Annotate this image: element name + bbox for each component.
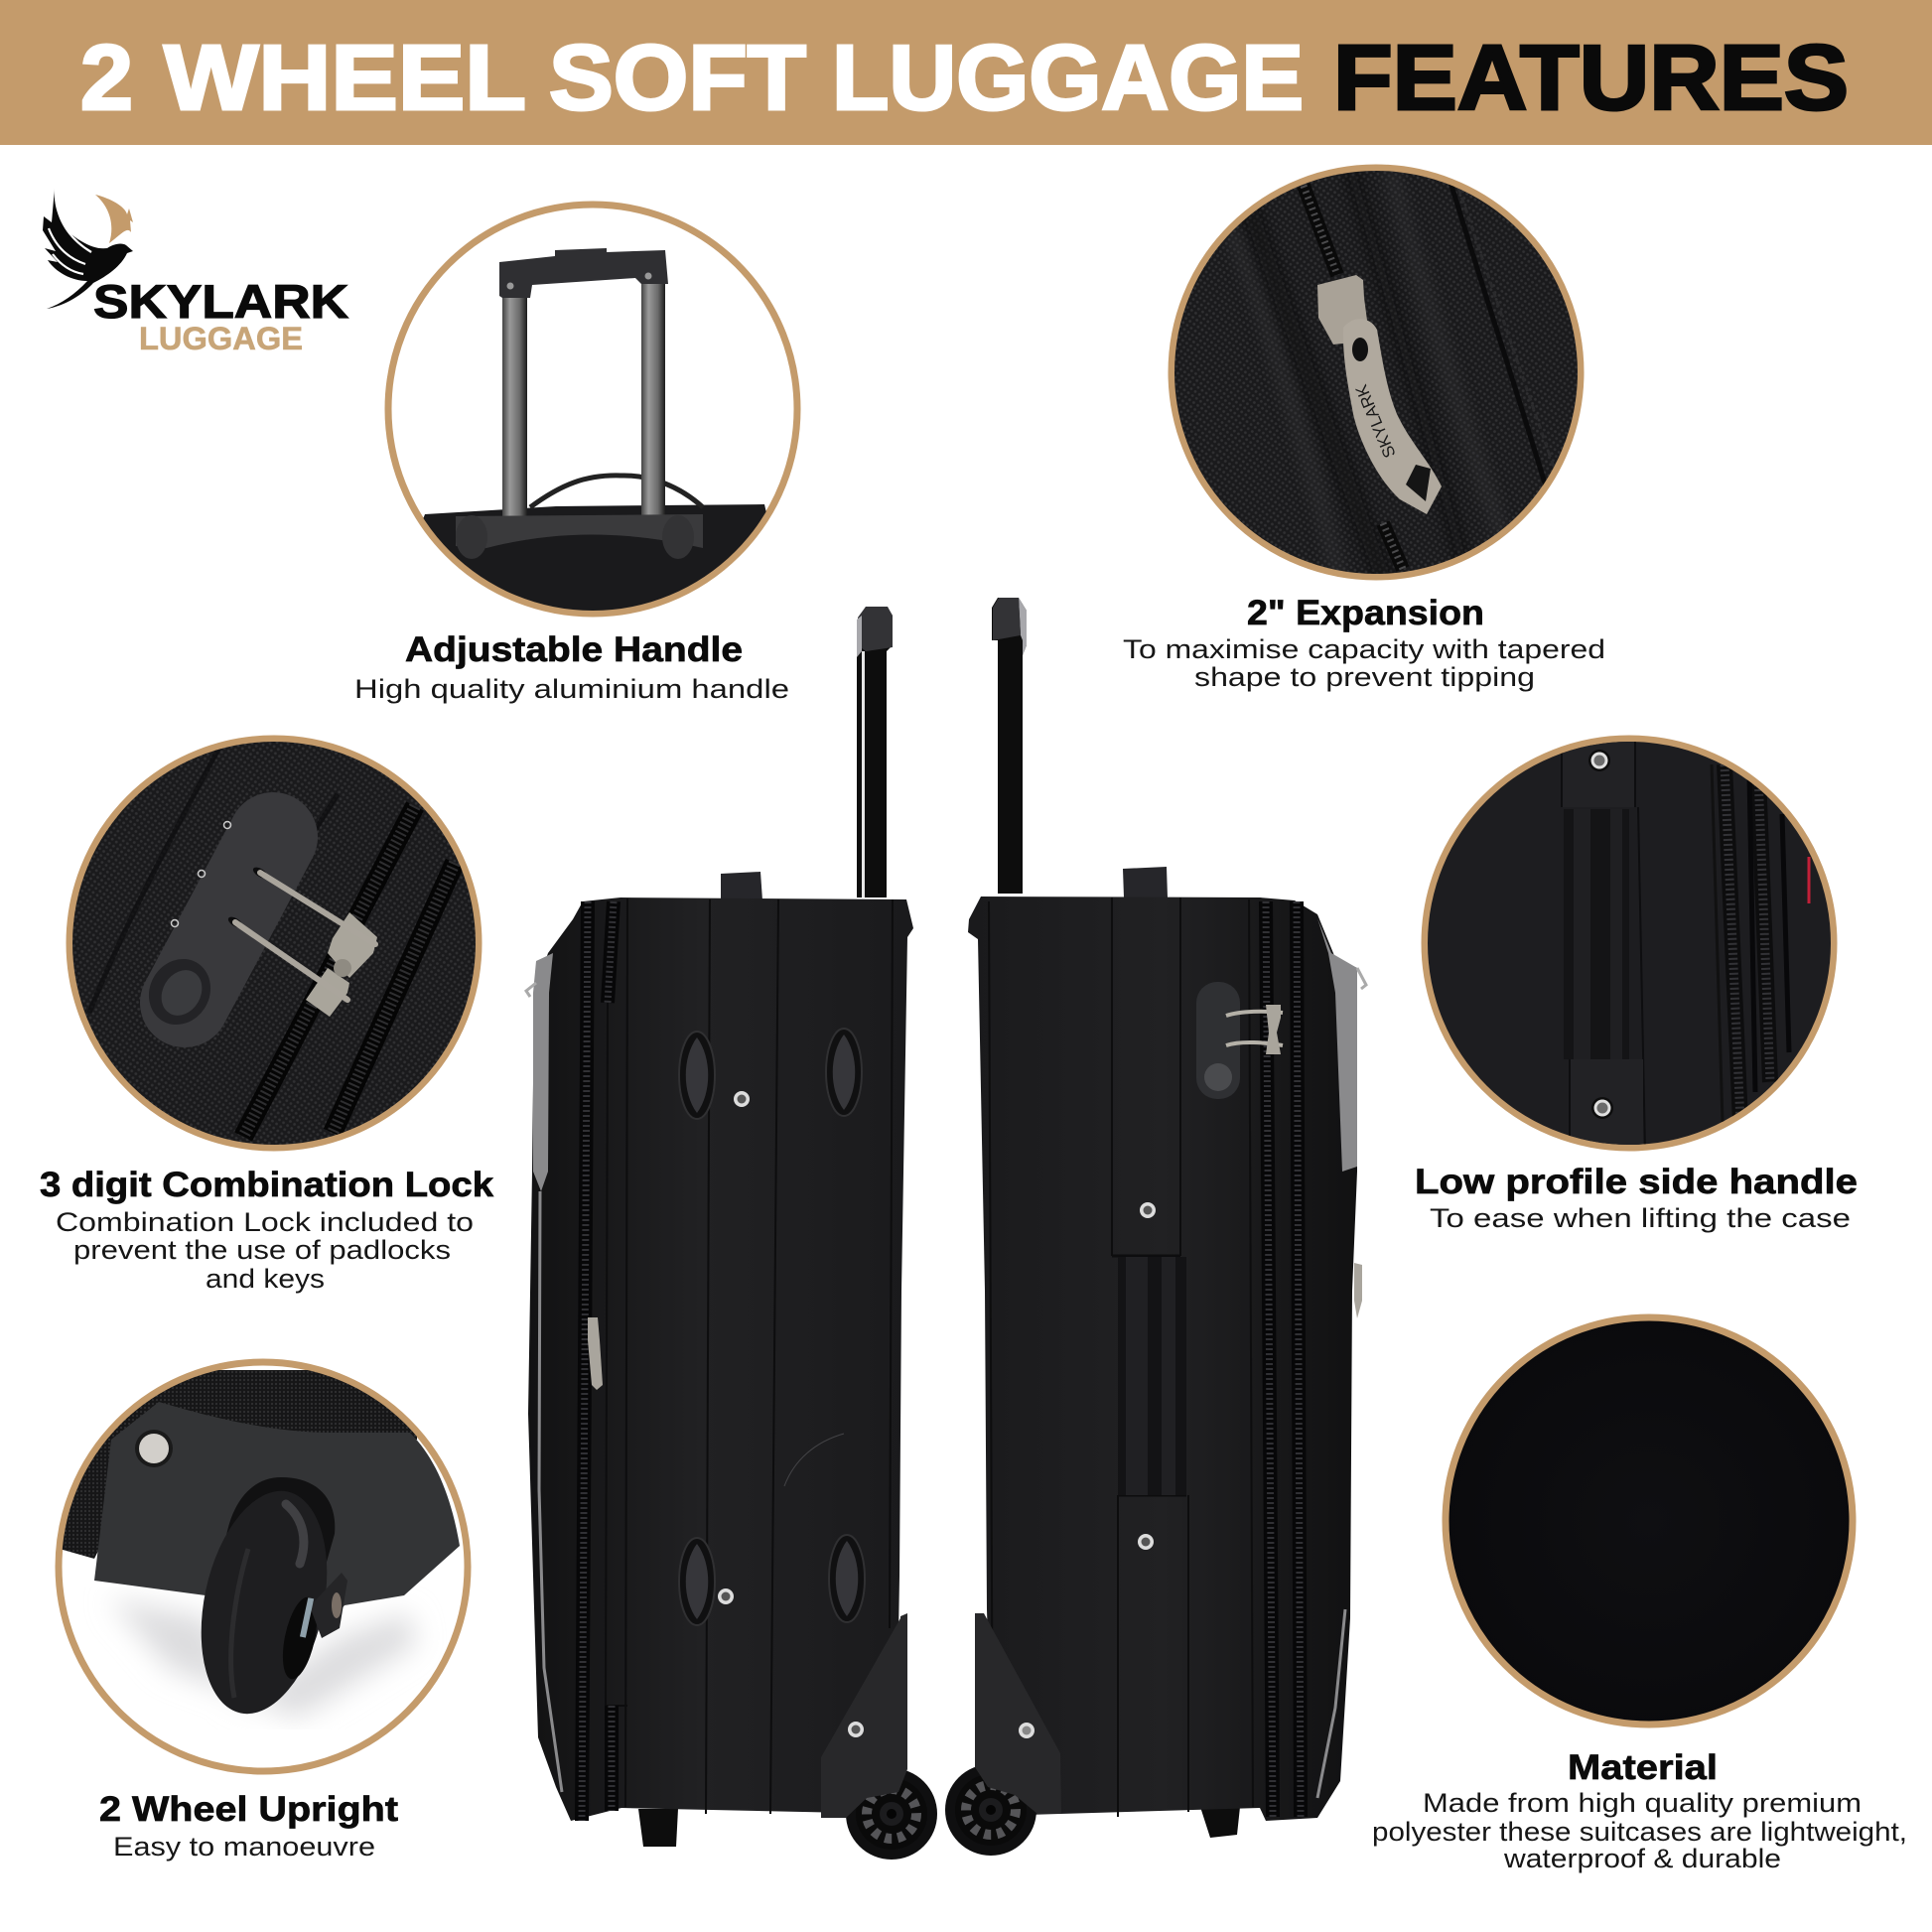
logo: Skylark Luggage bbox=[43, 188, 348, 356]
heading: 3 digit Combination Lock bbox=[40, 1166, 494, 1204]
photo circle: telescopic handle bbox=[377, 205, 797, 635]
carry handle bbox=[1123, 867, 1168, 897]
title bbox=[80, 26, 1849, 129]
rivets bbox=[718, 1091, 750, 1604]
side zip puller bbox=[1354, 1263, 1362, 1318]
description: and keys bbox=[206, 1264, 325, 1294]
combination lock bbox=[1196, 982, 1283, 1099]
logo: Skylark Luggage: LUGGAGE bbox=[139, 321, 303, 356]
description bbox=[1123, 634, 1605, 692]
zip puller bbox=[588, 1317, 603, 1390]
description: Combination Lock included to bbox=[56, 1207, 474, 1237]
carry handle bbox=[721, 872, 762, 900]
description: To maximise capacity with tapered bbox=[1123, 634, 1605, 664]
title: 2 bbox=[80, 26, 133, 129]
panel: adjustable handle bbox=[354, 205, 797, 704]
seams and stitching bbox=[989, 897, 1253, 1817]
rear foot bbox=[638, 1809, 678, 1847]
description bbox=[1372, 1788, 1907, 1873]
heading: Material bbox=[1568, 1748, 1718, 1787]
wheel bracket bbox=[975, 1613, 1061, 1814]
photo circle: wheel bbox=[59, 1362, 468, 1771]
wheel bbox=[945, 1764, 1036, 1856]
heading: Adjustable Handle bbox=[405, 630, 743, 669]
photo circle: side handle bbox=[1423, 736, 1840, 1153]
panel: material bbox=[1372, 1317, 1907, 1873]
bracket rivet bbox=[848, 1722, 864, 1737]
photo circle: fabric swatch bbox=[1446, 1317, 1853, 1725]
oval grip pads bbox=[679, 1029, 865, 1625]
description: High quality aluminium handle bbox=[354, 674, 789, 704]
logo: Skylark Luggage: SKYLARK bbox=[93, 275, 348, 328]
bracket rivet bbox=[1019, 1723, 1035, 1738]
case body bbox=[528, 897, 913, 1821]
description: shape to prevent tipping bbox=[1194, 662, 1535, 692]
panel: 2 wheel upright bbox=[59, 1362, 468, 1862]
title: WHEEL bbox=[164, 26, 526, 129]
telescopic handle bbox=[857, 607, 893, 897]
photo circle: lock bbox=[60, 725, 486, 1162]
photo circle: zip puller: SKYLARK bbox=[1351, 381, 1400, 461]
heading: 2 Wheel Upright bbox=[99, 1790, 398, 1829]
suitcase: right side view bbox=[945, 598, 1366, 1856]
suitcase: left side view bbox=[526, 607, 937, 1860]
description: To ease when lifting the case bbox=[1430, 1203, 1851, 1233]
panel: combination lock bbox=[40, 725, 494, 1294]
title: SOFT bbox=[549, 26, 806, 129]
icon: bird bbox=[43, 188, 133, 309]
wheel bbox=[846, 1768, 937, 1860]
heading: Low profile side handle bbox=[1415, 1163, 1858, 1201]
header banner bbox=[0, 0, 1932, 145]
panel: 2 inch expansion bbox=[1123, 159, 1605, 692]
description: prevent the use of padlocks bbox=[73, 1235, 451, 1265]
grey trim bbox=[1317, 918, 1366, 1798]
case body bbox=[968, 897, 1357, 1821]
panel: low profile side handle bbox=[1415, 736, 1858, 1233]
description: Easy to manoeuvre bbox=[113, 1832, 375, 1862]
rear foot bbox=[1200, 1807, 1240, 1838]
rivets bbox=[1138, 1202, 1156, 1550]
zipper channels bbox=[1266, 901, 1301, 1817]
photo circle: zip puller bbox=[1162, 159, 1588, 596]
title: LUGGAGE bbox=[832, 26, 1304, 129]
title: FEATURES bbox=[1333, 26, 1849, 129]
grey trim bbox=[526, 953, 562, 1792]
description: polyester these suitcases are lightweight, bbox=[1372, 1817, 1907, 1847]
description bbox=[56, 1207, 474, 1294]
description: Made from high quality premium bbox=[1423, 1788, 1862, 1818]
telescopic handle bbox=[992, 598, 1027, 894]
wheel bracket bbox=[821, 1613, 907, 1818]
seams and stitching bbox=[606, 898, 893, 1814]
heading: 2" Expansion bbox=[1247, 594, 1484, 632]
description: waterproof & durable bbox=[1503, 1844, 1781, 1873]
zipper channels bbox=[582, 901, 614, 1821]
recessed side handle bbox=[1118, 1257, 1186, 1495]
